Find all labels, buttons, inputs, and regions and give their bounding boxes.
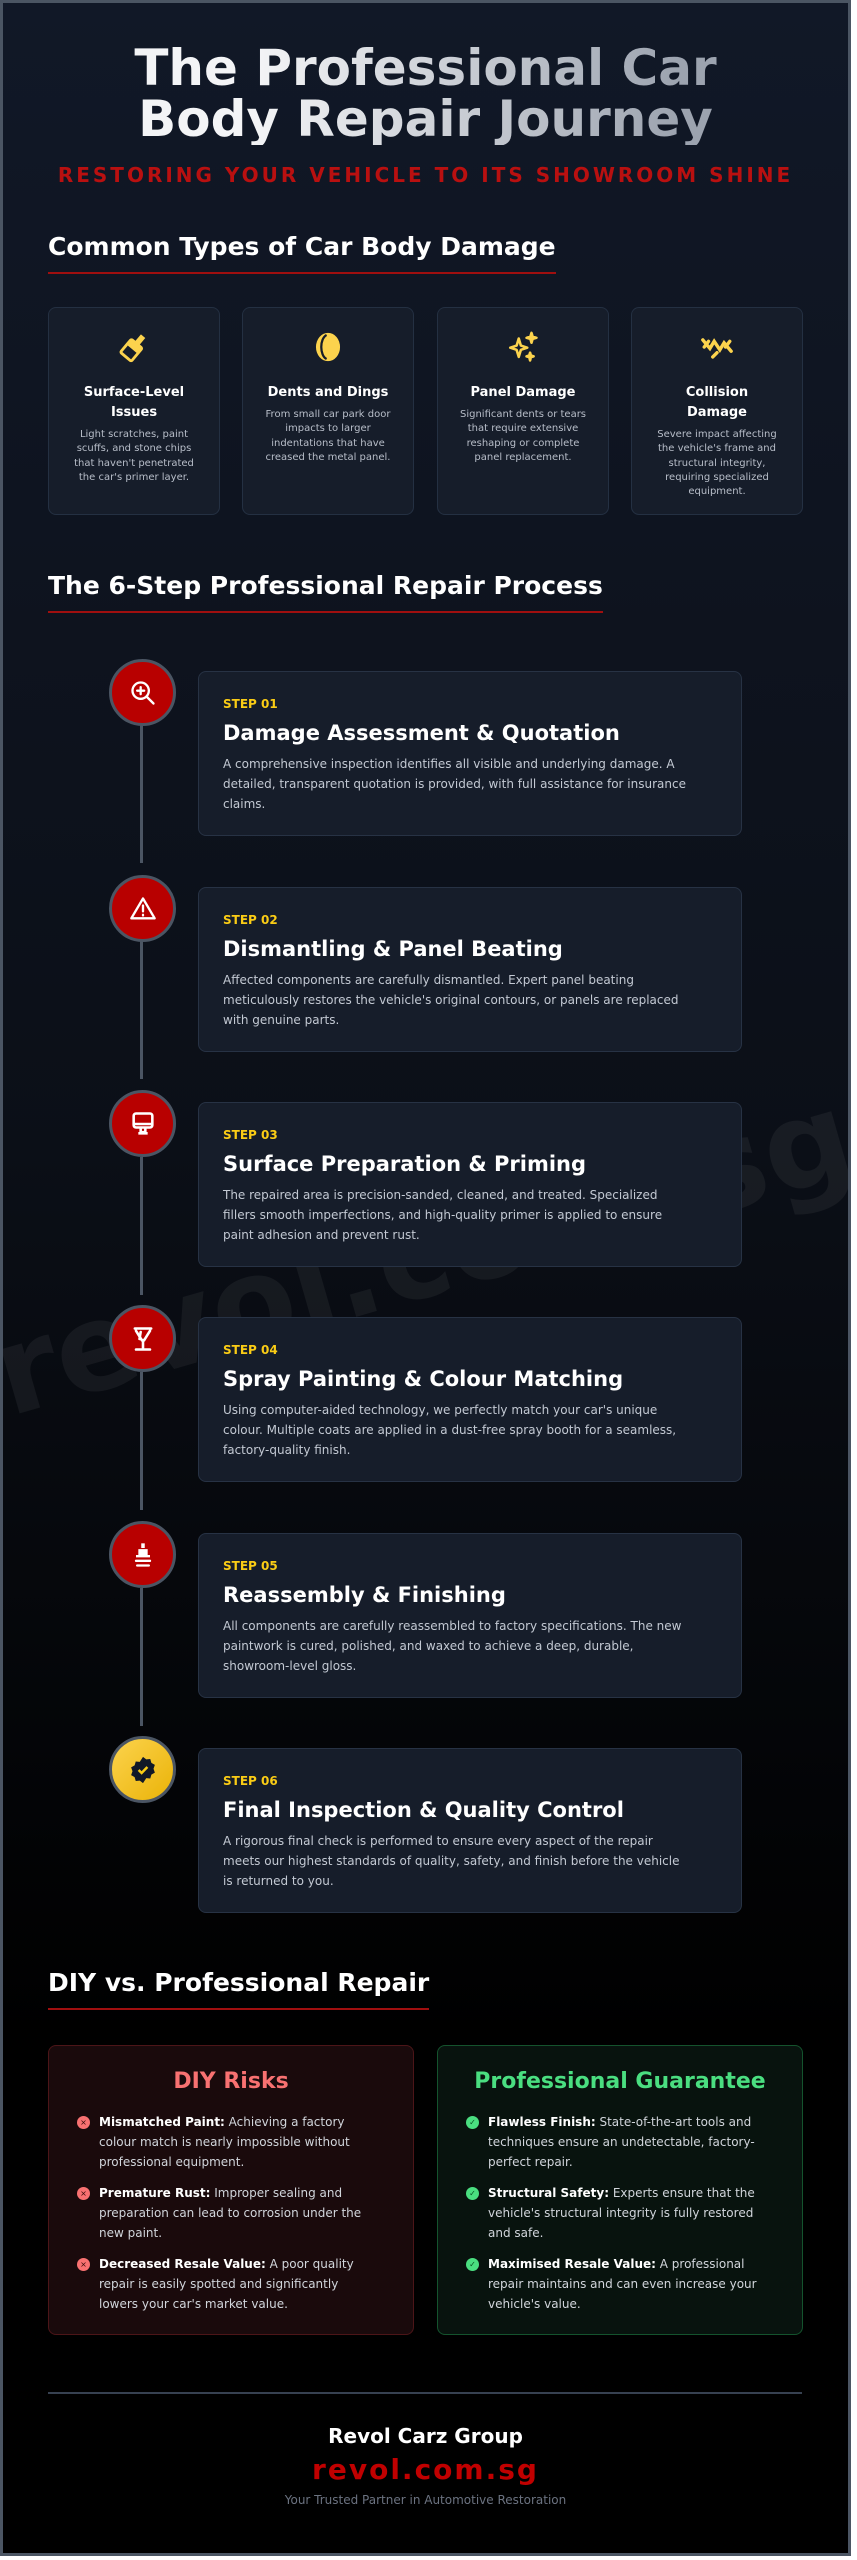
- step 4 card: colour. Multiple coats are applied in a dust-free spray booth for a seamless,: [223, 1423, 676, 1437]
- heading: common types: [48, 232, 556, 274]
- step 4 card: Spray Painting & Colour Matching: [223, 1367, 623, 1391]
- step 5 card: paintwork is cured, polished, and waxed to achieve a deep, durable,: [223, 1639, 633, 1653]
- panel: professional guarantee: Maximised Resale Value: A professional repair maintains and can even increase your vehicle's value.: [488, 2257, 757, 2311]
- card: panel: [437, 307, 609, 515]
- panel: damage cards: [48, 307, 803, 515]
- timeline lines: [140, 725, 143, 863]
- panel: professional guarantee: ✓: [469, 2260, 476, 2269]
- card: collision: Severe impact affecting the vehicle's frame and structural integrity, requiring specialized equipment.: [657, 429, 777, 497]
- panel: DIY risks: DIY Risks: [173, 2069, 289, 2094]
- card: dents: Dents and Dings: [268, 385, 388, 400]
- card: surface-level: [48, 307, 220, 515]
- step 2 card: meticulously restores the vehicle's original contours, or panels are replaced: [223, 993, 678, 1007]
- step 3 card: paint adhesion and prevent rust.: [223, 1228, 420, 1242]
- step 3 card: fillers smooth imperfections, and high-quality primer is applied to ensure: [223, 1208, 662, 1222]
- icon: step 6 badge check: [109, 1736, 176, 1803]
- step 3 card: Surface Preparation & Priming: [223, 1152, 586, 1176]
- icon: step 3 monitor: [109, 1090, 176, 1157]
- footer: [284, 2424, 566, 2507]
- title: [3, 43, 848, 145]
- panel: DIY risks: [48, 2045, 414, 2335]
- footer: Your Trusted Partner in Automotive Restoration: [285, 2493, 566, 2507]
- step 2 card: Affected components are carefully dismantled. Expert panel beating: [223, 973, 634, 987]
- heading: process: The 6-Step Professional Repair Process: [48, 571, 603, 600]
- step 4 card: Using computer-aided technology, we perfectly match your car's unique: [223, 1403, 657, 1417]
- step 3 card: STEP 03: [223, 1128, 278, 1142]
- step 1 card: claims.: [223, 797, 265, 811]
- step 3 card: [198, 1102, 742, 1267]
- panel: DIY risks: Premature Rust: Improper sealing and preparation can lead to corrosion under the new paint.: [99, 2186, 361, 2240]
- card: surface-level: Surface-Level Issues: [84, 385, 184, 420]
- card: collision: Damage: [687, 405, 747, 420]
- footer: Revol Carz Group: [328, 2424, 523, 2448]
- panel: DIY risks: Mismatched Paint: Achieving a factory colour match is nearly impossible without professional equipment.: [99, 2115, 350, 2169]
- step 6 card: A rigorous final check is performed to ensure every aspect of the repair: [223, 1834, 653, 1848]
- step 6 card: Final Inspection & Quality Control: [223, 1798, 624, 1822]
- step 5 card: Reassembly & Finishing: [223, 1583, 506, 1607]
- subtitle: RESTORING YOUR VEHICLE TO ITS SHOWROOM SHINE: [58, 163, 793, 187]
- heading: diy vs pro: DIY vs. Professional Repair: [48, 1968, 429, 1997]
- step 2 card: with genuine parts.: [223, 1013, 339, 1027]
- step 6 card: [198, 1748, 742, 1913]
- step 1 card: detailed, transparent quotation is provided, with full assistance for insurance: [223, 777, 686, 791]
- panel: DIY risks: ×: [80, 2260, 87, 2269]
- step 3 card: The repaired area is precision-sanded, cleaned, and treated. Specialized: [223, 1188, 657, 1202]
- step 2 card: STEP 02: [223, 913, 278, 927]
- step 2 card: [198, 887, 742, 1052]
- icon: moon dent: [316, 332, 340, 362]
- panel: DIY risks: ×: [80, 2189, 87, 2198]
- panel: professional guarantee: Structural Safety: Experts ensure that the vehicle's structural integrity is fully restored and safe.: [488, 2186, 755, 2240]
- heading: diy vs pro: [48, 1968, 429, 2010]
- panel: DIY risks: Decreased Resale Value: A poor quality repair is easily spotted and significantly lowers your car's market value.: [99, 2257, 354, 2311]
- heading: process: [48, 571, 603, 613]
- panel: professional guarantee: ✓: [469, 2189, 476, 2198]
- step 5 card: [198, 1533, 742, 1698]
- step 1 card: Damage Assessment & Quotation: [223, 721, 620, 745]
- step 5 card: showroom-level gloss.: [223, 1659, 356, 1673]
- card: surface-level: Light scratches, paint scuffs, and stone chips that haven't penetrated the car's primer layer.: [74, 429, 194, 483]
- icon: sparkles: [508, 332, 538, 362]
- step 1 card: [198, 671, 742, 836]
- card: dents: [242, 307, 414, 515]
- step 5 card: All components are carefully reassembled to factory specifications. The new: [223, 1619, 681, 1633]
- panel: professional guarantee: Professional Guarantee: [474, 2069, 766, 2094]
- step 1 card: A comprehensive inspection identifies all visible and underlying damage. A: [223, 757, 675, 771]
- panel: professional guarantee: ✓: [469, 2118, 476, 2127]
- card: dents: From small car park door impacts to larger indentations that have creased the metal panel.: [266, 409, 390, 463]
- step 4 card: [198, 1317, 742, 1482]
- icon: collision: [701, 338, 733, 359]
- icon: paint brush: [120, 334, 146, 362]
- panel: DIY risks: ×: [80, 2118, 87, 2127]
- panel: professional guarantee: Flawless Finish: State-of-the-art tools and techniques ensure an undetectable, factory-perfect repair.: [488, 2115, 755, 2169]
- title: Body Repair Journey: [138, 90, 713, 148]
- icon: step 2 warning: [109, 875, 176, 942]
- card: panel: Significant dents or tears that require extensive reshaping or complete panel replacement.: [460, 409, 586, 463]
- step 1 card: STEP 01: [223, 697, 278, 711]
- step 4 card: factory-quality finish.: [223, 1443, 350, 1457]
- footer: revol.com.sg: [312, 2453, 539, 2486]
- step 6 card: meets our highest standards of quality, safety, and finish before the vehicle: [223, 1854, 679, 1868]
- step 5 card: STEP 05: [223, 1559, 278, 1573]
- step 6 card: STEP 06: [223, 1774, 278, 1788]
- card: collision: Collision: [686, 385, 748, 400]
- title: The Professional Car: [134, 39, 717, 97]
- step 6 card: is returned to you.: [223, 1874, 334, 1888]
- icon: step 5 polisher: [109, 1521, 176, 1588]
- step 4 card: STEP 04: [223, 1343, 278, 1357]
- icon: step 1 magnifier: [109, 659, 176, 726]
- heading: common types: Common Types of Car Body Damage: [48, 232, 556, 261]
- step 2 card: Dismantling & Panel Beating: [223, 937, 563, 961]
- panel: professional guarantee: [437, 2045, 803, 2335]
- icon: step 4 spray: [109, 1305, 176, 1372]
- card: panel: Panel Damage: [470, 385, 576, 400]
- card: collision: [631, 307, 803, 515]
